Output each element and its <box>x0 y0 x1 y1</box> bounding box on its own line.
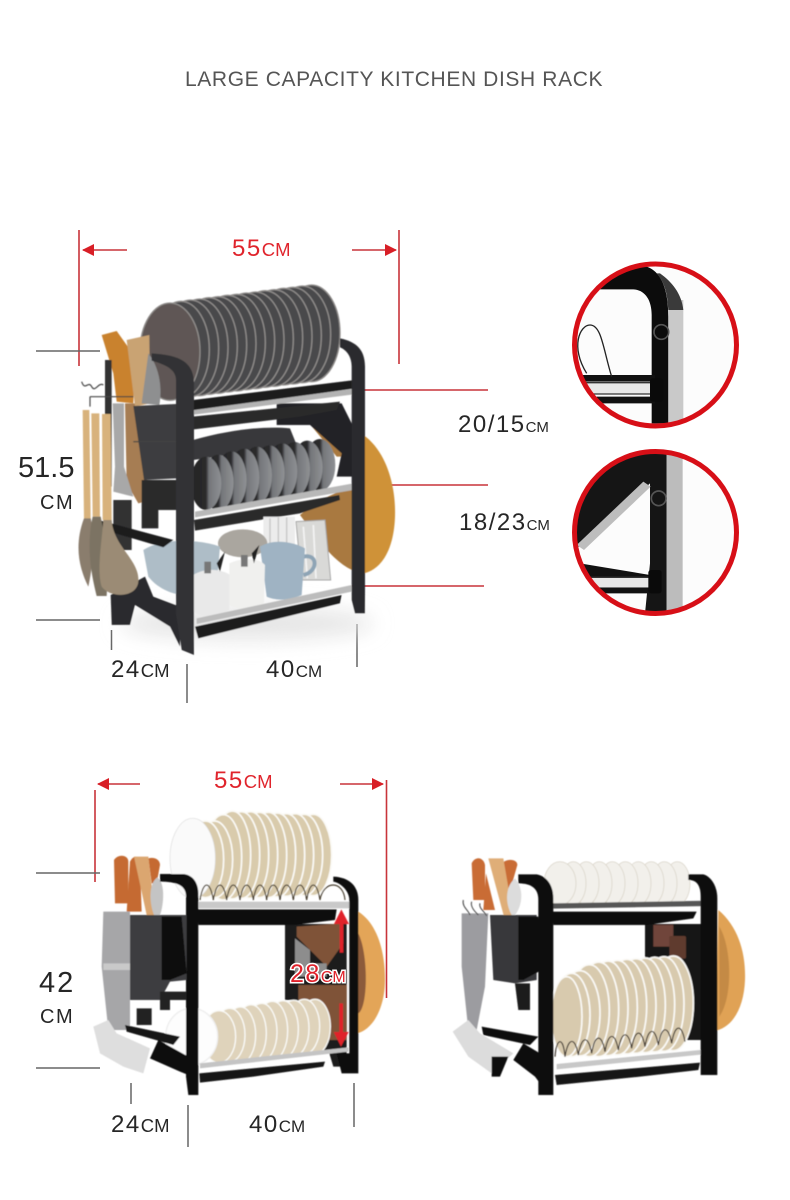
width label 55 cm: 55CM <box>232 235 290 262</box>
chopsticks <box>134 857 155 915</box>
depth label 24 cm: 24CM <box>111 1111 169 1138</box>
top shelf <box>552 901 711 925</box>
dimension lines: two tier rack <box>36 778 386 1147</box>
top shelf <box>193 380 357 429</box>
cream plates top <box>170 811 332 900</box>
knife holder <box>490 915 537 983</box>
knife holder <box>133 404 177 480</box>
detail circle: top joint <box>577 266 684 424</box>
left frame <box>105 360 132 550</box>
right post <box>333 877 358 1073</box>
middle shelf <box>194 483 353 531</box>
top shelf <box>197 902 350 925</box>
bracket wood accents <box>297 923 347 1040</box>
bracket wood block <box>669 936 686 959</box>
knife handles <box>472 858 517 910</box>
bowls row back <box>193 428 297 460</box>
two tier rack: plates on bottom <box>453 858 745 1095</box>
silver utensils <box>462 913 488 1030</box>
bottom shelf and tray <box>199 1047 348 1083</box>
jars <box>193 545 265 616</box>
down arrow <box>334 1003 349 1047</box>
side leg frame <box>111 577 180 647</box>
up arrow <box>334 909 349 953</box>
spacing label 20/15: 20/15CM <box>458 411 549 438</box>
cutting board <box>357 912 385 1033</box>
right post <box>340 338 365 613</box>
hanging utensil handles <box>83 410 112 520</box>
knife holder <box>130 915 187 1000</box>
bottom shelf and tray <box>555 1049 707 1085</box>
height unit: CM <box>40 1006 74 1028</box>
small tray <box>98 520 173 547</box>
hanging utensil heads <box>78 517 138 596</box>
front post <box>152 353 194 655</box>
silver utensils <box>102 912 130 1030</box>
lower holder basket <box>142 480 180 528</box>
dimension lines: three tier rack <box>36 230 488 703</box>
height unit: CM <box>40 492 74 514</box>
frame top arm <box>160 874 198 1095</box>
wood blade <box>125 403 150 503</box>
dish wire <box>200 885 345 900</box>
chopsticks <box>127 335 150 407</box>
title: LARGE CAPACITY KITCHEN DISH RACK <box>185 68 604 91</box>
knife handles <box>114 856 160 912</box>
detail circle rings <box>574 264 736 614</box>
bracket opening <box>653 925 673 947</box>
slotted heads <box>93 1020 150 1073</box>
three tier rack photo <box>78 285 395 655</box>
chopsticks <box>488 858 513 917</box>
cream plates bottom <box>166 999 330 1065</box>
wire hooks <box>463 900 487 916</box>
right post <box>688 874 717 1075</box>
detail circle: lower joint <box>577 454 683 611</box>
wire hooks <box>82 382 177 442</box>
rear bracket <box>277 403 357 477</box>
cream plates <box>551 956 693 1057</box>
small tray <box>482 1027 538 1045</box>
dish wire <box>555 1028 685 1057</box>
bottom shelf and tray <box>195 585 352 638</box>
dark plates <box>140 285 340 400</box>
grey bowls <box>191 439 335 511</box>
white bowls top <box>544 862 690 905</box>
width label 55 cm: 55CM <box>214 767 272 794</box>
rear bracket <box>285 924 347 1067</box>
side leg <box>150 1040 188 1075</box>
cutting board <box>716 910 745 1031</box>
bracket grey window <box>295 938 327 977</box>
length label 40 cm: 40CM <box>249 1111 305 1138</box>
front arm and post <box>518 874 553 1095</box>
lower clip <box>137 992 187 1025</box>
spacing label 18/23: 18/23CM <box>459 509 550 536</box>
mug <box>260 542 315 600</box>
length label 40 cm: 40CM <box>266 656 322 683</box>
rack shadow <box>120 607 373 640</box>
slotted heads <box>453 1020 513 1073</box>
two tier rack: plates on top <box>93 811 385 1095</box>
rear bracket <box>645 924 703 1040</box>
silver utensil <box>113 403 133 497</box>
silver spoon <box>507 878 521 915</box>
silver spoon <box>151 877 163 915</box>
side clip <box>515 983 530 1010</box>
depth label 24 cm: 24CM <box>111 656 169 683</box>
bowls lower <box>143 529 267 596</box>
glasses <box>263 517 331 580</box>
side leg <box>492 1043 540 1083</box>
knife handle <box>102 331 135 403</box>
height label 42: 42 <box>39 967 75 999</box>
height label 51.5: 51.5 <box>18 452 74 484</box>
small tray <box>125 1025 180 1045</box>
cutting board <box>300 425 395 574</box>
silver spatula <box>142 353 161 405</box>
label 28 cm: 28CM <box>290 960 346 988</box>
